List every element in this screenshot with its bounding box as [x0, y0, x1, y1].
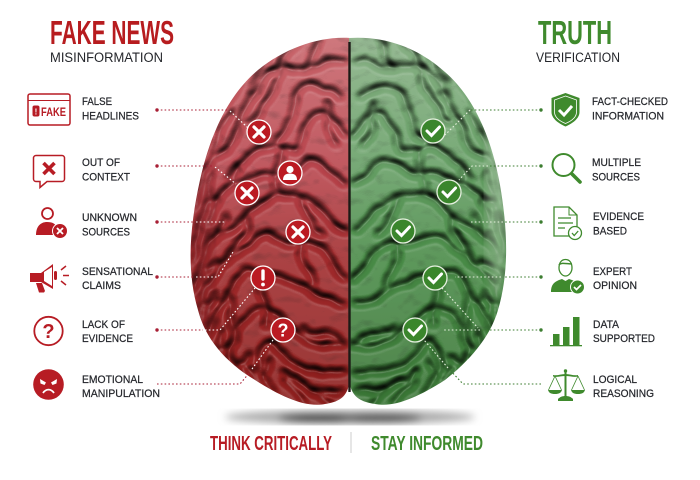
connector dots: verification — [539, 108, 543, 332]
text: fact-checked information: INFORMATION — [592, 110, 664, 122]
icon: speech bubble x — [34, 156, 64, 188]
brain: right green hemisphere — [349, 30, 515, 415]
icon: fake headline browser — [28, 94, 70, 125]
text: expert opinion: OPINION — [593, 280, 637, 292]
text: false headlines: FALSE — [82, 96, 112, 108]
text: multiple sources — [592, 157, 641, 184]
badge: x 1 — [247, 120, 271, 144]
badge: person — [278, 161, 302, 185]
text: emotional manipulation: MANIPULATION — [82, 388, 160, 400]
connector lines: verification — [424, 110, 541, 384]
icon: scales — [548, 369, 585, 401]
text: multiple sources: SOURCES — [592, 172, 640, 184]
text: out of context: OUT OF — [82, 157, 120, 169]
text: out of context — [82, 157, 130, 184]
text: logical reasoning: LOGICAL — [593, 374, 637, 386]
title: fake news — [50, 14, 174, 65]
icon: evidence document — [554, 207, 582, 240]
text: data supported — [593, 319, 655, 345]
title: fake news: MISINFORMATION — [50, 50, 163, 65]
text: sensational claims: SENSATIONAL — [82, 266, 153, 278]
text: evidence based: EVIDENCE — [593, 211, 644, 223]
footer slogan: THINK CRITICALLY — [210, 432, 332, 455]
text: data supported: DATA — [593, 319, 620, 331]
text: unknown sources: UNKNOWN — [82, 212, 137, 224]
text: unknown sources — [82, 212, 137, 238]
badge: check 2 — [437, 180, 461, 204]
icon: angry face — [33, 369, 64, 400]
text: lack of evidence: EVIDENCE — [82, 333, 133, 345]
badge: check 1 — [421, 119, 445, 143]
title: truth: TRUTH — [538, 14, 612, 51]
text: multiple sources: MULTIPLE — [592, 157, 641, 169]
badge: question: ? — [278, 320, 288, 340]
text: sensational claims — [82, 266, 153, 292]
text: data supported: SUPPORTED — [593, 333, 655, 345]
badge: question — [271, 318, 295, 342]
badge: check 4 — [423, 266, 447, 290]
icon: question circle: ? — [42, 321, 55, 343]
text: evidence based: BASED — [593, 226, 627, 238]
text: evidence based — [593, 211, 644, 238]
icon: question circle — [34, 317, 63, 345]
text: out of context: CONTEXT — [82, 172, 130, 184]
badge: x 2 — [235, 181, 259, 205]
icon: fake headline browser: ! — [35, 108, 37, 116]
text: logical reasoning — [593, 374, 654, 400]
text: emotional manipulation: EMOTIONAL — [82, 374, 143, 386]
text: fact-checked information — [592, 96, 668, 122]
icon: shield check — [552, 93, 580, 126]
badge: check 5 — [403, 318, 427, 342]
icon: fake headline browser: FAKE — [41, 105, 66, 119]
icon: megaphone — [30, 264, 69, 292]
title: truth — [536, 14, 620, 65]
text: expert opinion: EXPERT — [593, 266, 632, 278]
icon: bar chart — [550, 317, 582, 346]
footer slogan — [210, 432, 483, 455]
text: expert opinion — [593, 266, 637, 292]
brain: left red hemisphere — [185, 30, 351, 415]
badge: exclamation — [251, 266, 275, 290]
text: false headlines — [82, 96, 139, 122]
text: sensational claims: CLAIMS — [82, 280, 121, 292]
badge: check 3 — [391, 219, 415, 243]
brain shadow — [225, 410, 475, 424]
badge: x 3 — [286, 220, 310, 244]
icon: magnifier — [552, 154, 580, 182]
text: logical reasoning: REASONING — [593, 388, 654, 400]
brain midline — [348, 42, 351, 392]
text: emotional manipulation — [82, 374, 160, 400]
title: truth: VERIFICATION — [536, 50, 620, 65]
title: fake news: FAKE NEWS — [50, 14, 174, 51]
text: lack of evidence: LACK OF — [82, 319, 125, 331]
text: false headlines: HEADLINES — [82, 110, 139, 122]
connector dots: misinformation — [155, 108, 159, 332]
text: unknown sources: SOURCES — [82, 226, 130, 238]
icon: unknown person — [36, 208, 68, 238]
text: fact-checked information: FACT-CHECKED — [592, 96, 668, 108]
text: lack of evidence — [82, 319, 133, 345]
footer slogan: STAY INFORMED — [371, 432, 483, 455]
icon: expert person — [551, 260, 584, 294]
connector lines: misinformation — [157, 110, 273, 384]
